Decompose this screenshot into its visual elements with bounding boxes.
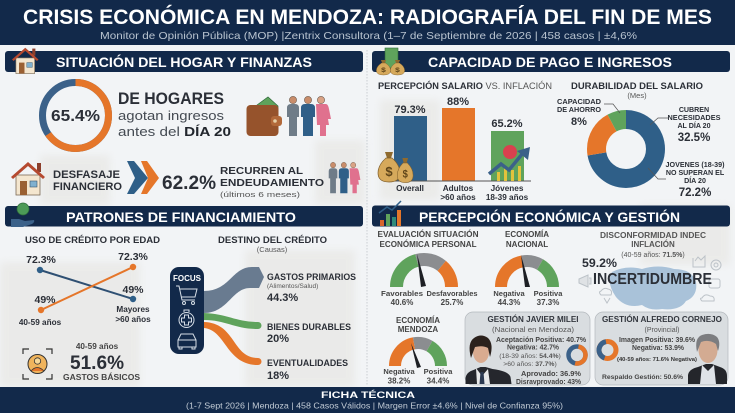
stat: 51.6% gastos básicos: 40-59 años bbox=[76, 342, 119, 351]
arrow: chevrons bbox=[127, 161, 159, 194]
label: jóvenes no superan bbox=[648, 161, 725, 199]
gauge: economía nacional bbox=[493, 230, 563, 307]
label: jóvenes no superan: NO SUPERAN EL bbox=[666, 169, 725, 177]
label: cubren necesidades bbox=[650, 106, 721, 144]
line chart: uso de crédito por edad: 40-59 años bbox=[19, 318, 62, 327]
donut: Milei bbox=[567, 345, 587, 365]
icon: chart heading bbox=[379, 201, 401, 226]
text: desfasaje financiero bbox=[53, 169, 122, 193]
label: capacidad de ahorro: 8% bbox=[571, 116, 587, 128]
heading: patrones bbox=[5, 206, 363, 226]
text: recurren al endeudamiento: ENDEUDAMIENTO bbox=[220, 177, 324, 189]
label: capacidad de ahorro: DE AHORRO bbox=[557, 106, 601, 114]
gauge: economía mendoza: MENDOZA bbox=[398, 325, 438, 334]
text: de hogares: agotan ingresos bbox=[118, 108, 225, 123]
block: incertidumbre: 59.2% bbox=[582, 256, 617, 270]
labels: destinos: (Alimentos/Salud) bbox=[267, 283, 318, 290]
gauge: situación personal: Desfavorables bbox=[426, 289, 478, 298]
panel: gestión Javier Milei: >60 años: 37.7%) bbox=[503, 361, 557, 368]
label: capacidad de ahorro bbox=[557, 98, 620, 128]
line chart: uso de crédito por edad: 72.3% bbox=[118, 251, 149, 263]
gauge: situación personal: EVALUACIÓN SITUACIÓN bbox=[378, 230, 479, 239]
gauge: economía mendoza: Positiva bbox=[424, 367, 453, 376]
gauge: economía nacional: NACIONAL bbox=[506, 240, 548, 249]
label: cubren necesidades: 32.5% bbox=[678, 132, 710, 144]
label: cubren necesidades: CUBREN bbox=[679, 106, 709, 114]
icon: wallet bbox=[246, 97, 282, 136]
text: recurren al endeudamiento: RECURREN AL bbox=[220, 165, 304, 177]
gauge: situación personal: Favorables bbox=[381, 289, 423, 298]
panel: gestión Alfredo Cornejo: Imagen Positiva: 39.6% bbox=[619, 337, 695, 344]
donut: durabilidad bbox=[596, 120, 656, 178]
subtitle: Monitor de Opinión Pública (MOP) |Zentrix Consultora (1–7 de Septiembre de 2026 | 458 casos | ±4,6% bbox=[100, 30, 637, 42]
icon: family bbox=[287, 96, 331, 136]
bar chart: Adultos bbox=[443, 184, 474, 193]
panel: gestión Alfredo Cornejo: Negativa: 53.9% bbox=[632, 345, 684, 352]
icon: money heading bbox=[376, 48, 405, 75]
block: incertidumbre bbox=[579, 231, 721, 310]
block: incertidumbre: DISCONFORMIDAD INDEC bbox=[600, 231, 706, 240]
portrait: Milei bbox=[466, 336, 512, 384]
panel: gestión Javier Milei: (Nacional en Mendoza) bbox=[492, 327, 574, 334]
icon: house heading bbox=[12, 48, 39, 74]
heading: percepción salario: PERCEPCIÓN SALARIO VS. INFLACIÓN bbox=[378, 80, 552, 91]
labels: destinos: 44.3% bbox=[267, 292, 298, 304]
panel: gestión Javier Milei: Aprovado: 36.9% bbox=[521, 371, 581, 378]
gauge: economía nacional: 37.3% bbox=[537, 298, 559, 307]
panel: gestión Alfredo Cornejo: (Provincial) bbox=[644, 327, 680, 334]
portrait: Cornejo bbox=[688, 334, 727, 384]
line chart: uso de crédito por edad: >60 años bbox=[115, 315, 151, 324]
heading: durabilidad del salario bbox=[571, 81, 703, 100]
panel: gestión Javier Milei: (18-39 años: 54.4%) bbox=[499, 353, 561, 360]
bar chart: 65.2% bbox=[491, 118, 523, 130]
heading: durabilidad del salario: DURABILIDAD DEL SALARIO bbox=[571, 81, 703, 91]
heading: situación del hogar: SITUACIÓN DEL HOGAR Y FINANZAS bbox=[56, 53, 312, 70]
heading: durabilidad del salario: (Mes) bbox=[627, 91, 647, 100]
label: cubren necesidades: AL DÍA 20 bbox=[677, 121, 711, 130]
text: recurren al endeudamiento: (últimos 6 meses) bbox=[220, 190, 301, 199]
heading: capacidad de pago bbox=[372, 51, 730, 72]
gauge: situación personal: ECONÓMICA PERSONAL bbox=[380, 240, 477, 249]
panel: focus bbox=[170, 267, 204, 354]
line chart: uso de crédito por edad: 49% bbox=[122, 284, 144, 296]
panel: gestión Alfredo Cornejo bbox=[595, 312, 728, 385]
panel: gestión Javier Milei bbox=[465, 312, 590, 386]
panel: patrones de financiamiento bbox=[5, 203, 363, 382]
text: recurren al endeudamiento bbox=[220, 165, 324, 199]
heading: patrones: PATRONES DE FINANCIAMIENTO bbox=[66, 209, 296, 225]
icon: house bbox=[11, 162, 45, 195]
line chart: uso de crédito por edad: Mayores bbox=[116, 305, 150, 314]
panel: gestión Javier Milei: Negativa: 42.7% bbox=[507, 344, 559, 352]
panel: gestión Javier Milei: Aceptación Positiva: 40.7% bbox=[496, 337, 586, 344]
panel: gestión Alfredo Cornejo: Respaldo Gestión: 50.6% bbox=[602, 374, 683, 381]
gauge: economía mendoza: 38.2% bbox=[388, 376, 410, 386]
gauge: situación personal: 40.6% bbox=[391, 298, 413, 307]
line chart: uso de crédito por edad: 72.3% bbox=[26, 254, 57, 266]
donut 65.4%: 65.4% bbox=[51, 108, 100, 125]
labels: destinos: BIENES DURABLES bbox=[267, 322, 351, 332]
labels: destinos: 18% bbox=[267, 370, 289, 382]
footer: ficha técnica bbox=[0, 387, 735, 413]
gauge: situación personal bbox=[378, 230, 479, 307]
labels: destinos: GASTOS PRIMARIOS bbox=[267, 272, 356, 282]
bar chart: Jóvenes bbox=[491, 184, 524, 193]
heading: percepción económica bbox=[372, 206, 730, 226]
block: incertidumbre: INCERTIDUMBRE bbox=[593, 271, 712, 288]
icon: person frame bbox=[23, 349, 52, 379]
line chart: uso de crédito por edad bbox=[19, 235, 161, 327]
text: desfasaje financiero: FINANCIERO bbox=[53, 181, 122, 193]
text: de hogares bbox=[118, 90, 231, 139]
text: de hogares: antes del DÍA 20 bbox=[118, 124, 231, 139]
stat: 62.2%: 62.2% bbox=[162, 173, 216, 194]
stat: 51.6% gastos básicos bbox=[63, 342, 140, 382]
donut 65.4% bbox=[42, 82, 108, 148]
heading: capacidad de pago: CAPACIDAD DE PAGO E INGRESOS bbox=[428, 54, 672, 70]
donut: Cornejo bbox=[597, 339, 618, 361]
gauge: economía mendoza: 34.4% bbox=[427, 376, 449, 386]
footer: ficha técnica: FICHA TÉCNICA bbox=[321, 390, 415, 401]
label: capacidad de ahorro: CAPACIDAD bbox=[557, 98, 601, 106]
gauge: economía nacional: Positiva bbox=[534, 289, 563, 298]
panel: gestión Alfredo Cornejo: GESTIÓN ALFREDO CORNEJO bbox=[602, 315, 722, 324]
bar chart: >60 años bbox=[440, 193, 476, 202]
bar chart: Overall bbox=[396, 184, 424, 193]
labels: destinos: EVENTUALIDADES bbox=[267, 358, 348, 368]
gauge: economía mendoza: ECONOMÍA bbox=[396, 316, 440, 325]
panel: gestión Javier Milei: Disravprovado: 43% bbox=[516, 379, 581, 386]
line chart: uso de crédito por edad: USO DE CRÉDITO POR EDAD bbox=[25, 235, 161, 245]
heading: situación del hogar bbox=[5, 51, 363, 72]
icon: family small bbox=[329, 162, 360, 193]
heading: destino del crédito: (Causas) bbox=[257, 245, 288, 254]
decorative icons bbox=[579, 256, 721, 303]
labels: destinos bbox=[267, 272, 356, 382]
stat: 51.6% gastos básicos: GASTOS BÁSICOS bbox=[63, 372, 140, 382]
block: incertidumbre: (40-59 años: 71.5%) bbox=[621, 252, 685, 259]
bar chart: 79.3% bbox=[394, 104, 426, 116]
label: cubren necesidades: NECESIDADES bbox=[668, 114, 721, 122]
heading: percepción económica: PERCEPCIÓN ECONÓMICA Y GESTIÓN bbox=[419, 208, 680, 225]
gauge: economía mendoza bbox=[383, 316, 453, 386]
panel: gestión Javier Milei: GESTIÓN JAVIER MILEI bbox=[488, 315, 578, 324]
labels: destinos: 20% bbox=[267, 333, 289, 345]
panel: focus: FOCUS bbox=[173, 274, 202, 283]
title: CRISIS ECONÓMICA EN MENDOZA: RADIOGRAFÍA DEL FIN DE MES bbox=[23, 5, 712, 29]
block: incertidumbre: INFLACIÓN bbox=[631, 240, 675, 249]
gauge: economía nacional: ECONOMÍA bbox=[505, 230, 549, 239]
gauge: economía mendoza: Negativa bbox=[383, 367, 415, 376]
bar chart: 18-39 años bbox=[486, 193, 529, 202]
panel: capacidad de pago e ingresos bbox=[372, 48, 730, 202]
label: jóvenes no superan: DÍA 20 bbox=[684, 176, 706, 185]
line chart: uso de crédito por edad: 49% bbox=[34, 294, 56, 306]
stat: 51.6% gastos básicos: 51.6% bbox=[70, 352, 124, 374]
gauge: economía nacional: Negativa bbox=[493, 289, 525, 298]
label: jóvenes no superan: JOVENES (18-39) bbox=[666, 161, 725, 169]
icon: hand with coin bbox=[11, 203, 34, 227]
gauge: economía nacional: 44.3% bbox=[498, 298, 520, 307]
icon: money bags bbox=[378, 152, 413, 183]
label: jóvenes no superan: 72.2% bbox=[679, 187, 711, 199]
heading: destino del crédito: DESTINO DEL CRÉDITO bbox=[218, 235, 327, 245]
text: desfasaje financiero: DESFASAJE bbox=[53, 169, 120, 181]
panel: situación del hogar y finanzas bbox=[5, 48, 363, 199]
footer: ficha técnica: (1-7 Sept 2026 | Mendoza | 458 Casos Válidos | Margen Error ±4.6% | Nivel de Confianza 95%) bbox=[186, 400, 563, 410]
bar chart bbox=[388, 96, 531, 202]
panel: percepción económica y gestión bbox=[372, 201, 730, 386]
icon: growth arrow bbox=[489, 145, 530, 181]
icon: car bbox=[178, 334, 196, 349]
icon: cloud bbox=[610, 266, 696, 310]
icon: cart bbox=[176, 286, 197, 304]
panel: gestión Alfredo Cornejo: (40-59 años: 71.6% Negativa) bbox=[617, 357, 697, 363]
text: de hogares: DE HOGARES bbox=[118, 90, 224, 108]
bar chart: 88% bbox=[447, 96, 469, 108]
header band bbox=[0, 0, 735, 45]
icon: medical cross bbox=[179, 310, 194, 328]
gauge: situación personal: 25.7% bbox=[441, 298, 463, 307]
chart: sankey flows bbox=[204, 267, 264, 365]
heading: destino del crédito bbox=[218, 235, 327, 254]
